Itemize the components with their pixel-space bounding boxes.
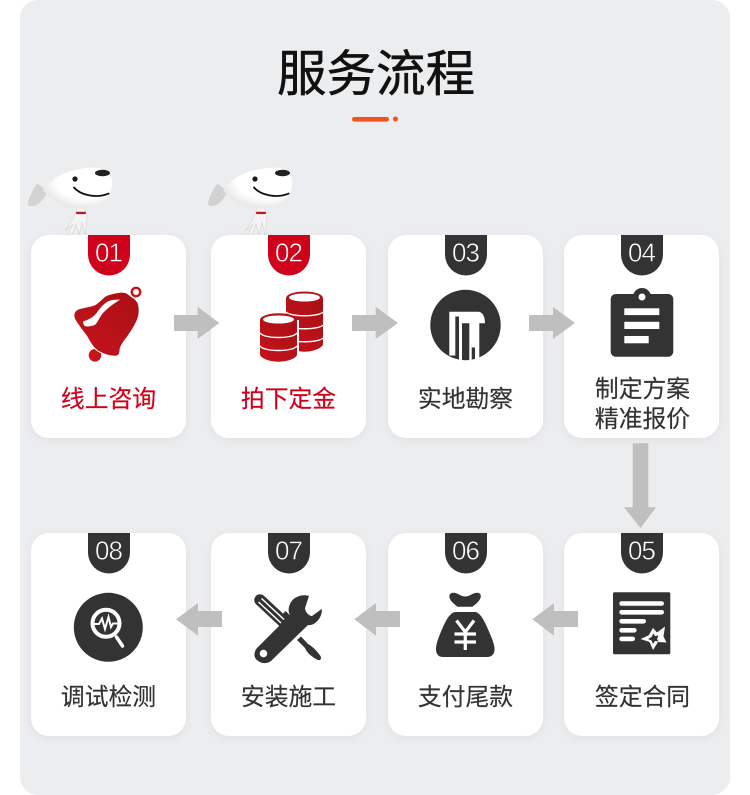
label: 精准报价 bbox=[595, 406, 690, 433]
mascot: dog 2 bbox=[208, 168, 292, 235]
step 08: testing bbox=[31, 533, 186, 736]
title accent: orange dash and dot bbox=[352, 116, 398, 122]
label: 支付尾款 bbox=[418, 684, 513, 711]
badge 08: 08 bbox=[95, 536, 122, 566]
icon: coin stacks bbox=[258, 292, 323, 362]
badge 04: 04 bbox=[628, 238, 655, 268]
mascot: dog 1 bbox=[28, 168, 112, 235]
step 05: sign contract bbox=[564, 533, 719, 736]
badge 04 bbox=[621, 235, 663, 276]
label: 安装施工 bbox=[241, 684, 336, 711]
label: 线上咨询 bbox=[61, 386, 156, 413]
badge 07 bbox=[268, 533, 310, 574]
icon: tools in circle bbox=[430, 290, 501, 360]
badge 03 bbox=[445, 235, 487, 276]
badge 07: 07 bbox=[275, 536, 302, 566]
step 01: online consultation bbox=[31, 235, 186, 438]
badge 02: 02 bbox=[275, 238, 302, 268]
step 07: installation bbox=[211, 533, 366, 736]
icon: bell bbox=[74, 288, 140, 362]
badge 01 bbox=[88, 235, 130, 276]
label: 签定合同 bbox=[595, 684, 690, 711]
icon: wrench and screwdriver bbox=[254, 595, 322, 663]
badge 06: 06 bbox=[452, 536, 479, 566]
arrow: 04 to 05 bbox=[624, 443, 656, 528]
badge 01: 01 bbox=[95, 238, 122, 268]
title: 服务流程 bbox=[277, 47, 475, 102]
label: 制定方案 bbox=[595, 376, 690, 403]
label: 实地勘察 bbox=[418, 386, 513, 413]
step 06: pay balance bbox=[388, 533, 543, 736]
arrow: 03 to 04 bbox=[529, 307, 575, 339]
label: 调试检测 bbox=[61, 684, 156, 711]
arrow: 02 to 03 bbox=[352, 307, 398, 339]
badge 05: 05 bbox=[628, 536, 655, 566]
badge 08 bbox=[88, 533, 130, 574]
icon: contract with star bbox=[613, 592, 670, 654]
badge 02 bbox=[268, 235, 310, 276]
icon: clipboard bbox=[611, 288, 673, 357]
icon: money bag bbox=[436, 593, 495, 657]
step 03: site survey bbox=[388, 235, 543, 438]
icon: magnifier with waveform bbox=[74, 593, 143, 662]
badge 05 bbox=[621, 533, 663, 574]
step 02: pay deposit bbox=[211, 235, 366, 438]
label: 拍下定金 bbox=[241, 386, 336, 413]
badge 06 bbox=[445, 533, 487, 574]
step 04: plan and quote bbox=[564, 235, 719, 438]
label bbox=[595, 376, 690, 433]
arrow: 01 to 02 bbox=[174, 307, 219, 339]
arrow: 07 to 08 bbox=[176, 603, 222, 636]
arrow: 06 to 07 bbox=[354, 603, 400, 636]
arrow: 05 to 06 bbox=[532, 603, 578, 636]
badge 03: 03 bbox=[452, 238, 479, 268]
